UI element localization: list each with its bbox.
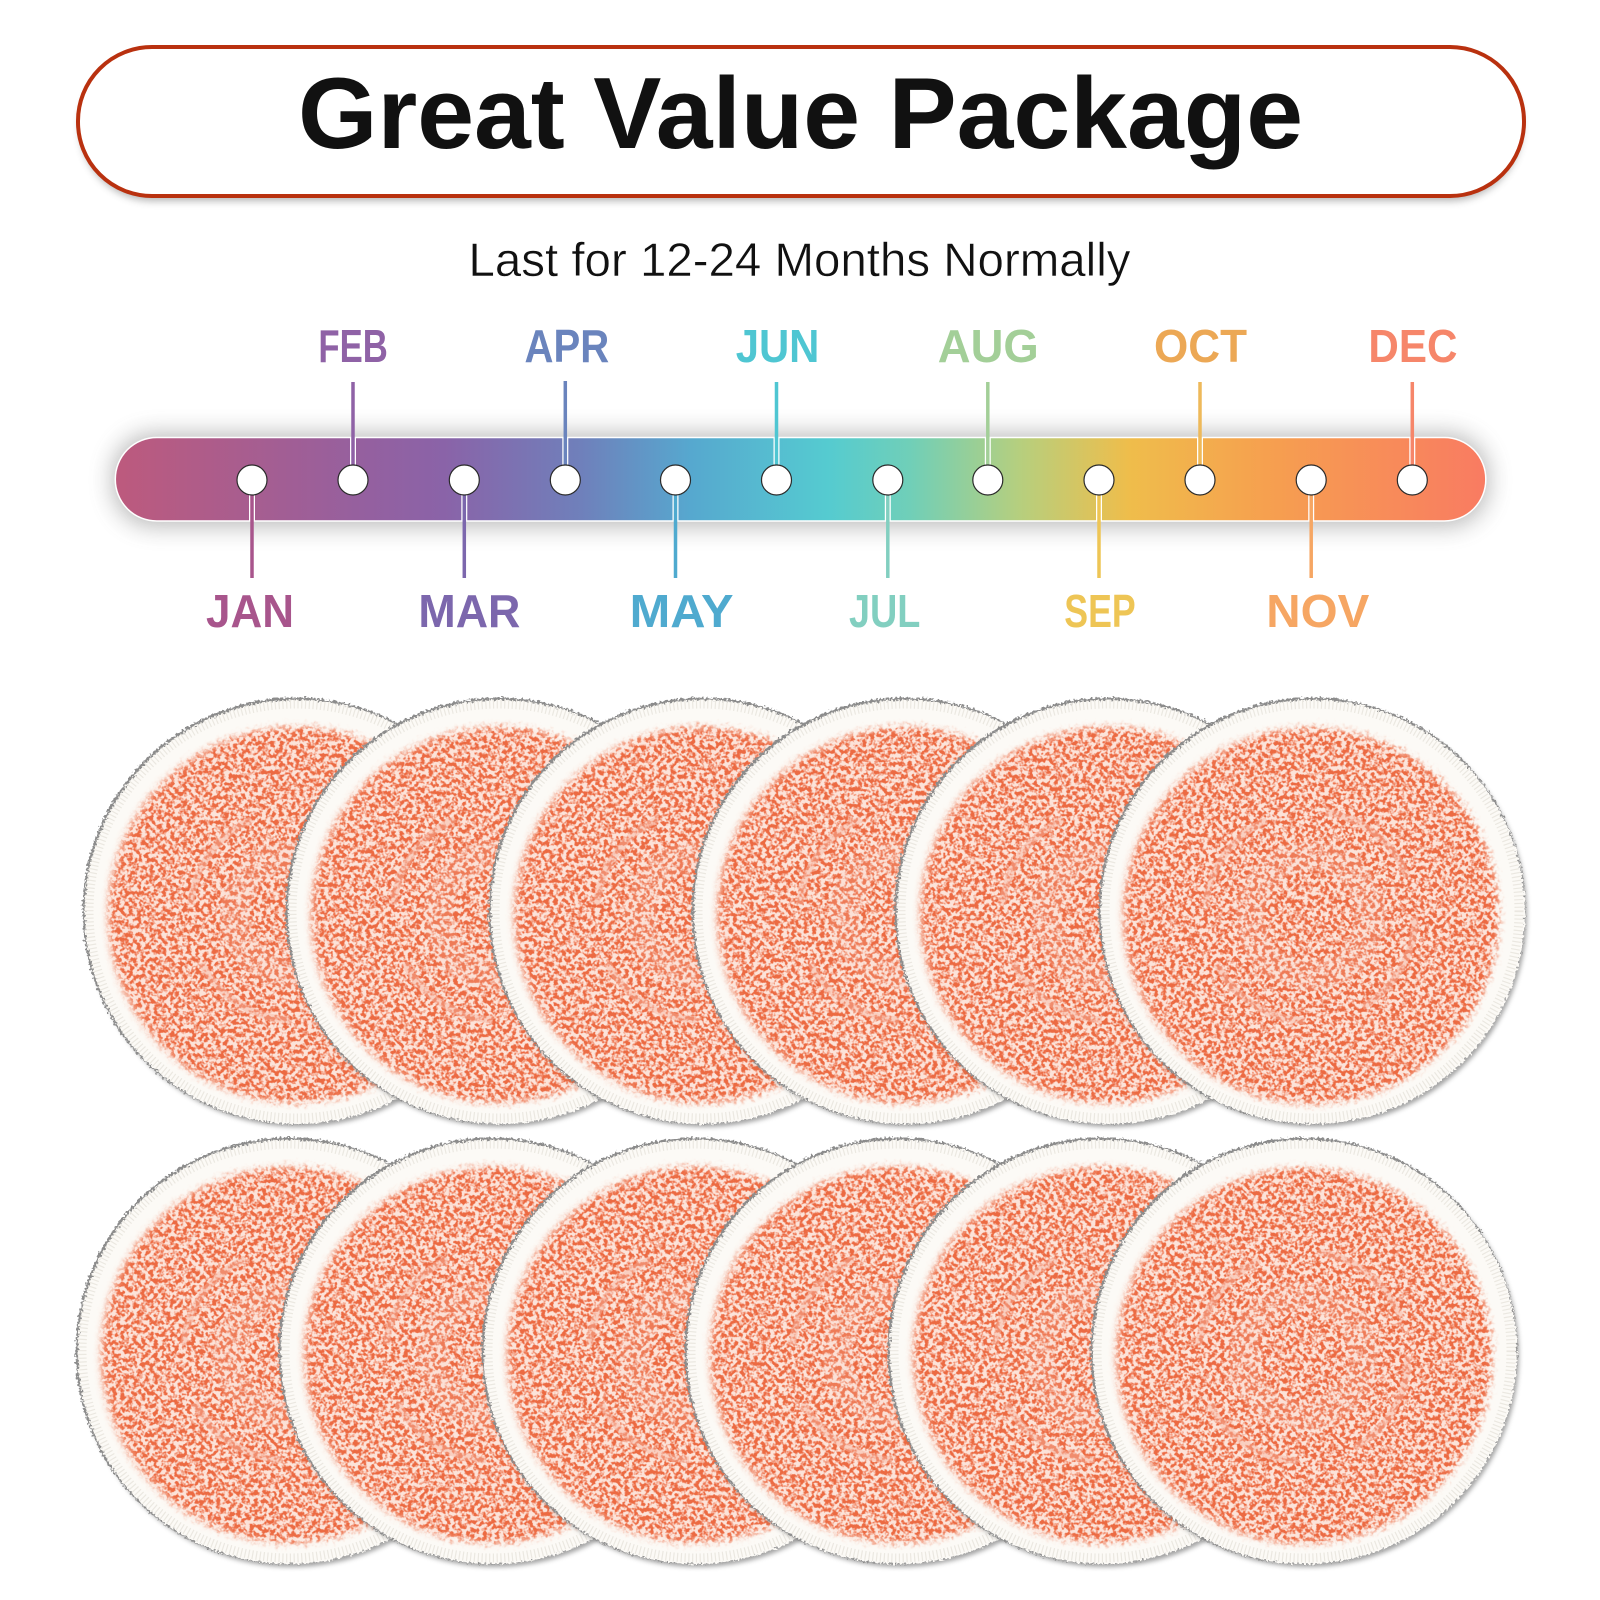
mop pad 4 xyxy=(692,698,1120,1127)
mop pad 9 xyxy=(482,1138,910,1567)
month: NOV: NOV xyxy=(1266,585,1370,637)
top row of mop pads xyxy=(82,698,1527,1127)
mop pad 5 xyxy=(894,698,1323,1127)
subtitle: Last for 12-24 Months Normally xyxy=(468,233,1131,286)
bottom row of mop pads xyxy=(76,1138,1519,1567)
month: JAN xyxy=(206,465,294,637)
month: JUN: JUN xyxy=(736,320,819,372)
mop pad 7 xyxy=(76,1138,504,1567)
month: JAN: JAN xyxy=(206,585,294,637)
mop pad 3 xyxy=(488,698,917,1127)
mop pad 11 xyxy=(888,1138,1316,1567)
mop pad 8 xyxy=(278,1138,707,1567)
mop pad 10 xyxy=(684,1138,1113,1567)
month: OCT: OCT xyxy=(1154,320,1247,372)
month: FEB xyxy=(318,320,388,495)
title pill outline xyxy=(78,47,1524,196)
month: APR: APR xyxy=(524,320,609,372)
month: MAR xyxy=(418,465,520,637)
month: MAY xyxy=(630,465,734,637)
month: AUG: AUG xyxy=(938,320,1039,372)
month: SEP: SEP xyxy=(1064,585,1136,637)
month: APR xyxy=(524,320,609,495)
month: MAR: MAR xyxy=(418,585,520,637)
month: DEC: DEC xyxy=(1368,320,1457,372)
title banner xyxy=(78,47,1524,201)
month: JUL xyxy=(849,465,920,637)
month: JUL: JUL xyxy=(849,585,920,637)
title text: Great Value Package xyxy=(298,58,1303,170)
month: NOV xyxy=(1266,465,1370,637)
month: DEC xyxy=(1368,320,1457,495)
mop pad 1 xyxy=(82,698,511,1127)
gradient bar xyxy=(115,438,1486,521)
mop pad 12 xyxy=(1090,1138,1519,1567)
month: SEP xyxy=(1064,465,1136,637)
month: FEB: FEB xyxy=(318,320,388,372)
month: OCT xyxy=(1154,320,1247,495)
month: JUN xyxy=(736,320,819,495)
mop pad 2 xyxy=(286,698,714,1127)
mop pad 6 xyxy=(1098,698,1527,1127)
month: MAY: MAY xyxy=(630,585,734,637)
month: AUG xyxy=(938,320,1039,495)
month timeline xyxy=(113,320,1488,637)
